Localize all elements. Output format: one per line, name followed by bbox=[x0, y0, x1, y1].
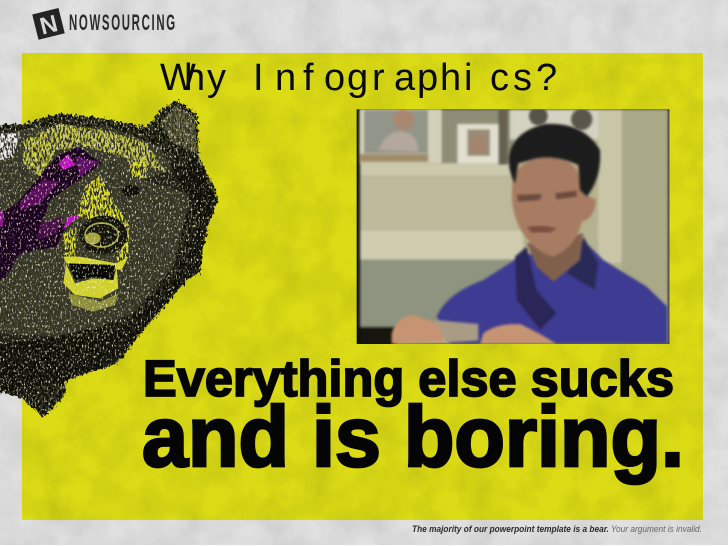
dark right mane and throat bbox=[0, 160, 217, 393]
hands and card bbox=[392, 315, 557, 344]
open mouth bbox=[68, 263, 115, 280]
forehead yellow patches bbox=[23, 123, 167, 177]
footer caption: The majority of our powerpoint template is a bear. Your argument is invalid. bbox=[412, 524, 702, 535]
upper lip bbox=[63, 257, 128, 270]
eye bbox=[122, 185, 139, 196]
icon: rotated N badge: N bbox=[37, 10, 61, 41]
lower jaw bbox=[63, 263, 118, 298]
framed photos on mantel bbox=[360, 107, 592, 164]
icon: rotated N badge bbox=[32, 8, 65, 42]
magenta highlight upper bbox=[58, 154, 75, 170]
left cheek patch bbox=[63, 227, 77, 260]
nose rings bbox=[79, 216, 127, 254]
bear silhouette bbox=[0, 101, 218, 417]
logo: Nowsourcing bbox=[32, 8, 177, 42]
purple stripe bbox=[0, 147, 102, 280]
headline bbox=[142, 350, 684, 485]
fur shading and face bbox=[0, 100, 220, 420]
man's shirt bbox=[437, 237, 667, 344]
headline line 1: Everything else sucks bbox=[143, 350, 674, 407]
snout bridge bbox=[77, 175, 130, 267]
illustration: bear head bbox=[0, 100, 220, 420]
white fur at left bbox=[0, 133, 20, 160]
ear fill bbox=[160, 105, 197, 153]
man's neck bbox=[527, 233, 583, 282]
magenta highlight lower bbox=[63, 216, 79, 230]
photo: man holding a card bbox=[357, 107, 669, 344]
title: Why Infographics? bbox=[160, 57, 557, 99]
dark overlay hatching bbox=[0, 100, 220, 420]
man's face bbox=[512, 157, 596, 257]
logo wordmark: NOWSOURCING bbox=[69, 10, 177, 35]
headline line 2: and is boring. bbox=[142, 390, 684, 485]
light fur hatching bbox=[0, 100, 220, 420]
grey fur mass bbox=[0, 127, 190, 343]
room background bbox=[360, 109, 668, 344]
man's hair bbox=[509, 124, 600, 197]
